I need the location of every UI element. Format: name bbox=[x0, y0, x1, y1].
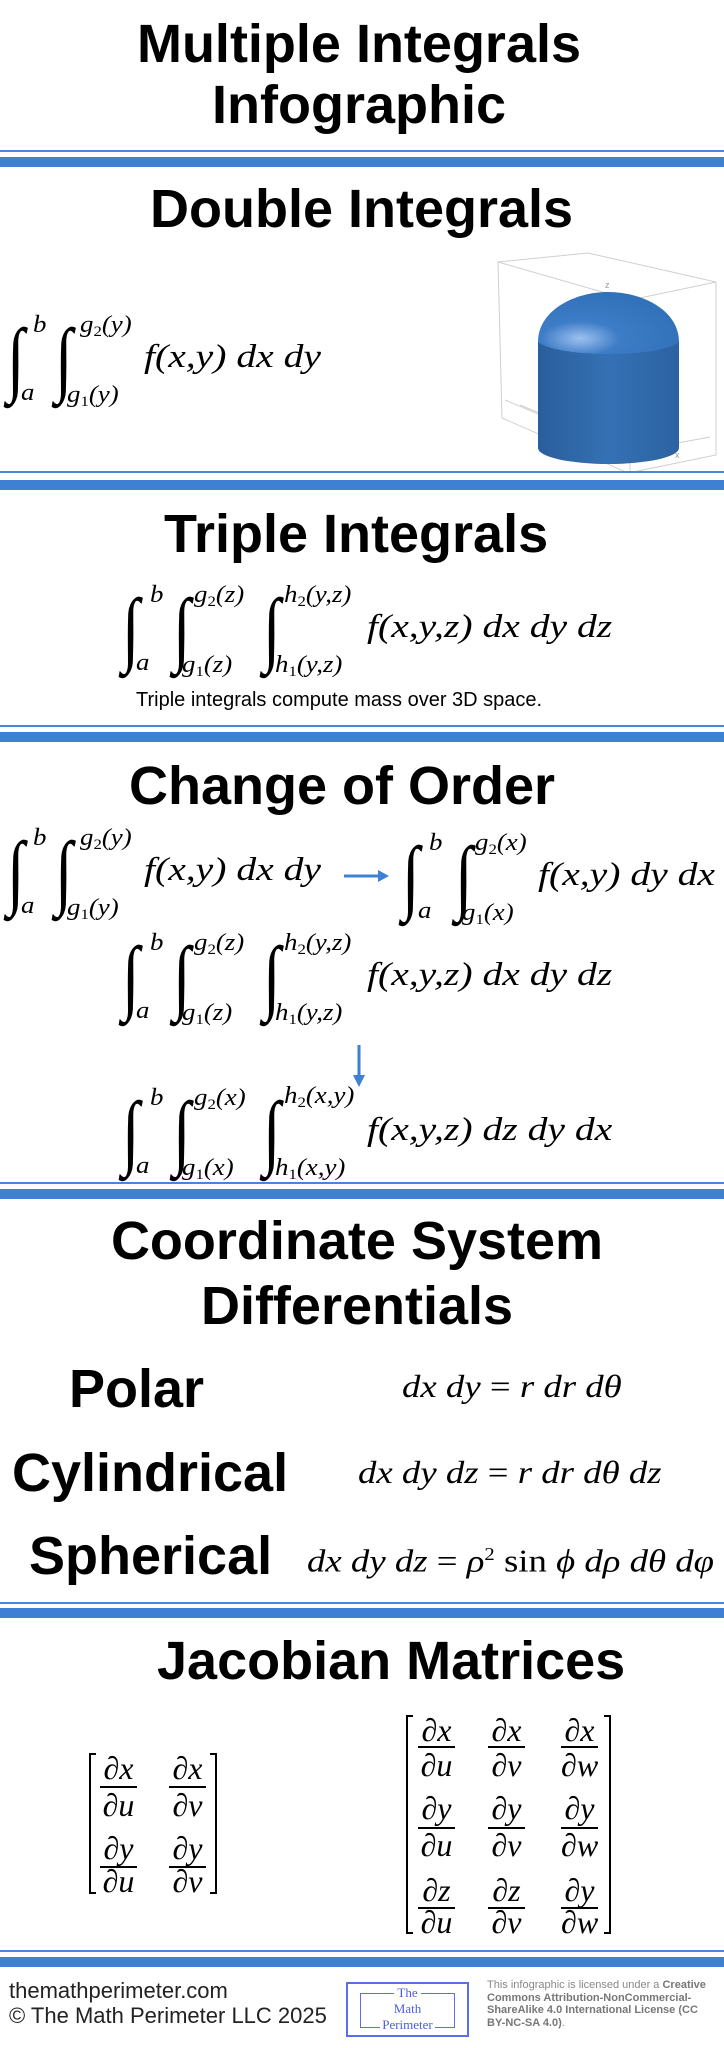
arrow: right bbox=[344, 870, 389, 882]
formula: triple integral dz dy dx: f(x,y,z) dz dy dx bbox=[367, 1112, 612, 1148]
formula: double integral dx dy: a bbox=[21, 893, 34, 919]
formula: triple integral: b bbox=[150, 582, 163, 608]
formula: double integral: a bbox=[21, 380, 34, 406]
matrix: 3x3 jacobian: ∂v bbox=[491, 1904, 522, 1940]
logo: the math perimeter: Perimeter bbox=[382, 2017, 433, 2032]
logo: the math perimeter: The bbox=[397, 1985, 418, 2000]
formula: double integral dx dy: g1(y) bbox=[67, 895, 119, 923]
formula: double integral dy dx: ∫ bbox=[402, 830, 420, 922]
matrix: 3x3 jacobian: ∂u bbox=[421, 1827, 452, 1863]
heading: jacobian matrices: Jacobian Matrices bbox=[157, 1631, 625, 1691]
formula: triple integral dz dy dx bbox=[118, 1083, 612, 1183]
formula: double integral: g1(y) bbox=[67, 382, 119, 410]
matrix: 3x3 jacobian: ∂u bbox=[421, 1747, 452, 1783]
heading: coordinate system differentials: Differentials bbox=[201, 1276, 513, 1336]
matrix: 3x3 jacobian: ∂y bbox=[421, 1790, 452, 1826]
formula: double integral: f(x,y) dx dy bbox=[144, 339, 321, 375]
formula: triple integral dz dy dx: a bbox=[136, 1153, 149, 1179]
matrix: 3x3 jacobian: ∂w bbox=[561, 1827, 598, 1863]
matrix: 2x2 jacobian: ∂y bbox=[172, 1830, 202, 1866]
formula: triple integral dz dy dx: g1(x) bbox=[182, 1155, 234, 1183]
formula: triple integral dz dy dx: ∫ bbox=[173, 1085, 191, 1177]
formula: triple integral dz dy dx: h2(x,y) bbox=[284, 1083, 354, 1111]
label: polar: Polar bbox=[69, 1359, 204, 1419]
footer: site and copyright: themathperimeter.com bbox=[9, 1978, 228, 2003]
formula: triple integral dx dy dz: ∫ bbox=[263, 930, 281, 1022]
logo: the math perimeter bbox=[346, 1982, 469, 2037]
formula: double integral dx dy bbox=[4, 825, 321, 923]
formula: triple integral dz dy dx: b bbox=[150, 1085, 163, 1111]
illustration: 3D cylinder with dome bbox=[498, 252, 716, 474]
footer: license text: This infographic is licensed under a Creative Commons Attribution-NonCommercial-ShareAlike 4.0 International License (CC BY-NC-SA 4.0). bbox=[487, 1979, 706, 2029]
illustration: 3D cylinder with dome: x bbox=[675, 450, 680, 460]
formula: triple integral dz dy dx: h1(x,y) bbox=[275, 1155, 345, 1183]
formula: double integral dy dx: a bbox=[418, 898, 431, 924]
matrix: 2x2 jacobian: ∂x bbox=[172, 1750, 202, 1786]
formula: double integral dx dy: b bbox=[33, 825, 46, 851]
formula: triple integral dx dy dz: b bbox=[150, 930, 163, 956]
heading: change of order: Change of Order bbox=[129, 756, 555, 816]
formula: double integral dy dx: g1(x) bbox=[462, 900, 514, 928]
arrow: down bbox=[353, 1045, 365, 1087]
matrix: 2x2 jacobian: ∂y bbox=[103, 1830, 134, 1866]
formula: double integral dx dy: g2(y) bbox=[80, 825, 132, 853]
formula: double integral dy dx: g2(x) bbox=[475, 830, 527, 858]
formula: cylindrical: dx dy dz = r dr dθ dz bbox=[358, 1454, 662, 1490]
matrix: 2x2 jacobian bbox=[89, 1750, 217, 1899]
formula: triple integral dz dy dx: ∫ bbox=[122, 1085, 140, 1177]
matrix: 2x2 jacobian: ∂v bbox=[172, 1863, 202, 1899]
heading: double integrals: Double Integrals bbox=[150, 179, 573, 239]
formula: double integral dy dx: f(x,y) dy dx bbox=[538, 857, 715, 893]
formula: triple integral: g2(z) bbox=[194, 582, 244, 610]
formula: triple integral dz dy dx: g2(x) bbox=[194, 1085, 246, 1113]
matrix: 3x3 jacobian: ∂v bbox=[491, 1827, 522, 1863]
formula: double integral dx dy: ∫ bbox=[55, 825, 73, 917]
footer: site and copyright: © The Math Perimeter LLC 2025 bbox=[9, 2003, 327, 2028]
formula: triple integral bbox=[118, 582, 612, 680]
matrix: 2x2 jacobian: ∂u bbox=[103, 1863, 134, 1899]
formula: double integral dy dx: ∫ bbox=[455, 830, 473, 922]
matrix: 3x3 jacobian: ∂x bbox=[564, 1712, 594, 1748]
matrix: 2x2 jacobian: ∂x bbox=[103, 1750, 134, 1786]
formula: triple integral: a bbox=[136, 650, 149, 676]
formula: triple integral dz dy dx: ∫ bbox=[263, 1085, 281, 1177]
footer: site and copyright bbox=[9, 1978, 327, 2028]
formula: spherical: dx dy dz = ρ2 sin ϕ dρ dθ dφ bbox=[307, 1543, 714, 1579]
formula: triple integral dx dy dz: f(x,y,z) dx dy dz bbox=[367, 957, 612, 993]
caption: triple integrals: Triple integrals compute mass over 3D space. bbox=[136, 689, 542, 711]
matrix: 3x3 jacobian: ∂v bbox=[491, 1747, 522, 1783]
formula: double integral dy dx: b bbox=[429, 830, 442, 856]
formula: triple integral dx dy dz: a bbox=[136, 998, 149, 1024]
title: Infographic bbox=[212, 75, 506, 135]
formula: triple integral: ∫ bbox=[263, 582, 281, 674]
formula: triple integral: ∫ bbox=[122, 582, 140, 674]
label: cylindrical: Cylindrical bbox=[12, 1443, 288, 1503]
formula: double integral: ∫ bbox=[7, 312, 25, 404]
formula: triple integral: f(x,y,z) dx dy dz bbox=[367, 609, 612, 645]
matrix: 3x3 jacobian: ∂x bbox=[491, 1712, 522, 1748]
title bbox=[137, 14, 581, 135]
formula: triple integral: h2(y,z) bbox=[284, 582, 351, 610]
formula: double integral dx dy: ∫ bbox=[7, 825, 25, 917]
matrix: 3x3 jacobian: ∂u bbox=[421, 1904, 452, 1940]
formula: double integral: ∫ bbox=[55, 312, 73, 404]
logo: the math perimeter: Math bbox=[394, 2001, 421, 2016]
formula: double integral dy dx bbox=[398, 830, 715, 928]
title: Multiple Integrals bbox=[137, 14, 581, 74]
heading: coordinate system differentials: Coordinate System bbox=[111, 1211, 603, 1271]
heading: triple integrals: Triple Integrals bbox=[164, 504, 548, 564]
formula: polar: dx dy = r dr dθ bbox=[402, 1368, 622, 1404]
matrix: 3x3 jacobian: ∂w bbox=[561, 1747, 598, 1783]
formula: triple integral dx dy dz bbox=[118, 930, 612, 1028]
matrix: 3x3 jacobian: ∂y bbox=[564, 1872, 594, 1908]
heading: coordinate system differentials bbox=[111, 1211, 603, 1336]
formula: triple integral dx dy dz: h2(y,z) bbox=[284, 930, 351, 958]
matrix: 2x2 jacobian: ∂v bbox=[172, 1787, 202, 1823]
matrix: 3x3 jacobian: ∂y bbox=[564, 1790, 594, 1826]
formula: triple integral dx dy dz: h1(y,z) bbox=[275, 1000, 342, 1028]
matrix: 3x3 jacobian: ∂x bbox=[421, 1712, 452, 1748]
matrix: 3x3 jacobian: ∂z bbox=[422, 1872, 451, 1908]
formula: triple integral dx dy dz: ∫ bbox=[173, 930, 191, 1022]
matrix: 2x2 jacobian: ∂u bbox=[103, 1787, 134, 1823]
formula: triple integral dx dy dz: g1(z) bbox=[182, 1000, 232, 1028]
formula: triple integral: g1(z) bbox=[182, 652, 232, 680]
formula: double integral bbox=[4, 312, 321, 410]
label: spherical: Spherical bbox=[29, 1526, 272, 1586]
formula: triple integral dx dy dz: ∫ bbox=[122, 930, 140, 1022]
illustration: 3D cylinder with dome: z bbox=[605, 280, 610, 290]
matrix: 3x3 jacobian: ∂z bbox=[492, 1872, 521, 1908]
matrix: 3x3 jacobian: ∂y bbox=[491, 1790, 522, 1826]
formula: triple integral: h1(y,z) bbox=[275, 652, 342, 680]
matrix: 3x3 jacobian: ∂w bbox=[561, 1904, 598, 1940]
formula: triple integral: ∫ bbox=[173, 582, 191, 674]
formula: double integral: g2(y) bbox=[80, 312, 132, 340]
formula: double integral dx dy: f(x,y) dx dy bbox=[144, 852, 321, 888]
formula: triple integral dx dy dz: g2(z) bbox=[194, 930, 244, 958]
matrix: 3x3 jacobian bbox=[406, 1712, 611, 1940]
formula: double integral: b bbox=[33, 312, 46, 338]
